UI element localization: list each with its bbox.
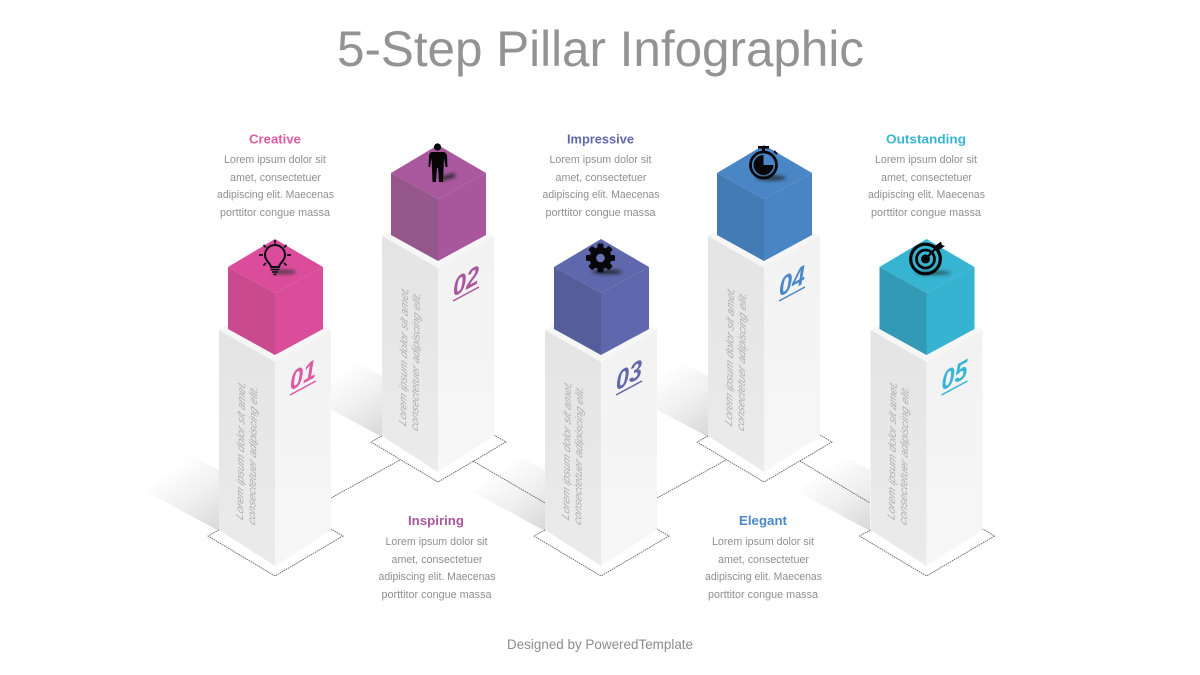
side text 1: Lorem ipsum dolor sit amet, [233, 378, 248, 522]
number 05: 05 [942, 353, 968, 397]
cube 5 [880, 239, 974, 355]
text block: Elegant: porttitor congue massa [708, 589, 819, 601]
text block: Creative: adipiscing elit. Maecenas [217, 189, 334, 201]
text block: Creative: porttitor congue massa [220, 207, 331, 219]
text block: Outstanding: Lorem ipsum dolor sit [875, 154, 977, 166]
side text 2: Lorem ipsum dolor sit amet, [396, 284, 411, 428]
connector lines [331, 460, 870, 503]
text block: Elegant: amet, consectetuer [718, 554, 809, 566]
text block: Creative: amet, consectetuer [230, 172, 321, 184]
number 03: 03 [616, 353, 642, 397]
text block: Outstanding: Outstanding [886, 132, 966, 146]
text block: Inspiring: porttitor congue massa [382, 589, 492, 601]
side text 5: consectetuer adipiscing elit. [897, 383, 911, 527]
text block: Elegant: Elegant [739, 513, 788, 528]
text block: Impressive: Impressive [567, 132, 634, 146]
text block: Creative [217, 132, 334, 219]
pillar 5 [860, 239, 994, 576]
icon: stopwatch [750, 146, 786, 181]
text block: Inspiring [378, 513, 496, 601]
number 01: 01 [290, 353, 316, 397]
pillar 3 [534, 239, 669, 576]
side text 1 [233, 378, 260, 527]
side text 3: consectetuer adipiscing elit. [571, 383, 586, 527]
cube 1 [228, 239, 323, 355]
text block: Elegant [705, 513, 822, 601]
text block: Creative: Creative [249, 132, 301, 146]
number 04: 04 [779, 259, 805, 303]
text block: Impressive: amet, consectetuer [556, 172, 647, 184]
side text 2: consectetuer adipiscing elit. [408, 289, 423, 433]
icon: gear [586, 244, 622, 274]
text block: Outstanding: amet, consectetuer [881, 172, 972, 184]
side text 5 [885, 378, 911, 527]
side text 3 [559, 378, 586, 527]
text block: Outstanding: adipiscing elit. Maecenas [868, 189, 985, 201]
text block: Creative: Lorem ipsum dolor sit [224, 154, 326, 166]
title: 5-Step Pillar Infographic [337, 21, 864, 77]
text block: Impressive: porttitor congue massa [546, 207, 656, 219]
side text 1: consectetuer adipiscing elit. [245, 383, 260, 527]
side text 2 [396, 284, 423, 433]
icon: person [428, 143, 455, 182]
text block: Impressive [542, 132, 660, 219]
pillar 2 [371, 145, 506, 482]
side text 4 [722, 284, 749, 433]
text block: Outstanding: porttitor congue massa [871, 207, 982, 219]
cube 2 [391, 145, 486, 261]
side text 4: Lorem ipsum dolor sit amet, [722, 284, 737, 428]
text block: Impressive: Lorem ipsum dolor sit [550, 154, 652, 166]
text block: Inspiring: Inspiring [408, 513, 464, 528]
number 02: 02 [453, 259, 479, 303]
text block: Impressive: adipiscing elit. Maecenas [542, 189, 660, 201]
pillar 4 [697, 145, 832, 482]
side text 5: Lorem ipsum dolor sit amet, [885, 378, 899, 522]
text block: Elegant: adipiscing elit. Maecenas [705, 571, 822, 583]
text block: Elegant: Lorem ipsum dolor sit [712, 536, 814, 548]
footer credit: Designed by PoweredTemplate [507, 636, 693, 652]
text block: Inspiring: Lorem ipsum dolor sit [386, 536, 488, 548]
cube 3 [554, 239, 649, 355]
cast shadow: pillars [145, 361, 870, 531]
side text 3: Lorem ipsum dolor sit amet, [559, 378, 574, 522]
pillar 1 [208, 239, 343, 576]
side text 4: consectetuer adipiscing elit. [734, 289, 749, 433]
icon: target [911, 242, 951, 275]
text block: Inspiring: amet, consectetuer [392, 554, 483, 566]
icon: lightbulb [259, 240, 296, 275]
text block: Outstanding [868, 132, 985, 219]
cube 4 [717, 145, 812, 261]
text block: Inspiring: adipiscing elit. Maecenas [378, 571, 496, 583]
